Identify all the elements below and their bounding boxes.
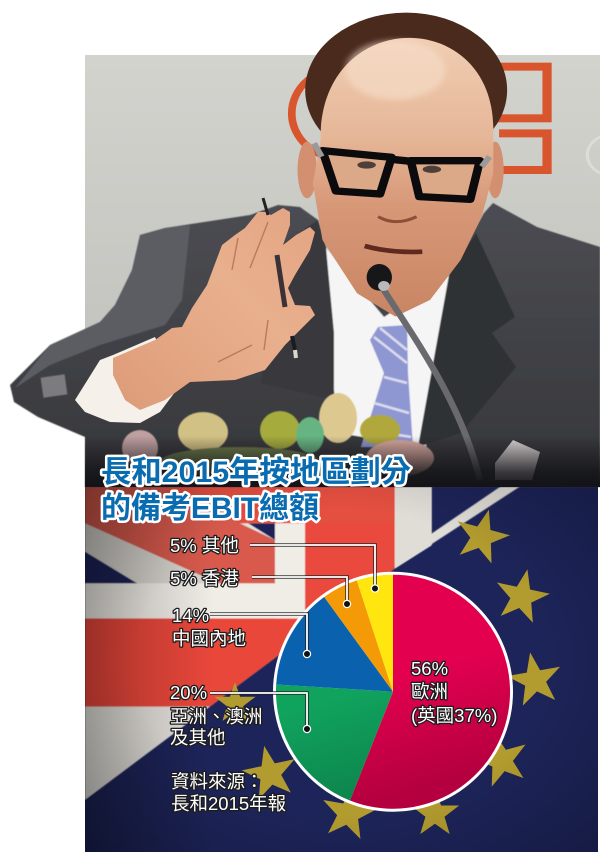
flower arrangement [122,393,434,477]
hair [305,13,507,167]
slice: Asia Australia 20% [276,684,393,800]
label: Asia Australia and others 20% [170,682,263,748]
tie [361,325,413,447]
face [313,38,493,317]
label: Asia Australia and others 20%: 及其他 [170,727,226,748]
suit [10,203,600,487]
leader lines [210,545,379,733]
wall backdrop [85,55,600,487]
source note [171,771,286,814]
cuff [75,337,178,423]
sleeve buttons [41,374,67,398]
pen [263,198,296,358]
orange logo [292,67,547,170]
EU stars [214,503,566,841]
microphone [367,264,480,480]
slice: China 14% [276,597,393,692]
glasses temples [314,143,489,167]
lapel shadow [418,233,516,447]
label: Europe 56%: 56% [411,658,448,679]
title: 長和2015年按地區劃分 [101,456,411,489]
ears [298,142,317,198]
label: Europe 56%: (英國37%) [411,705,497,726]
label: Asia Australia and others 20%: 亞洲、澳洲 [170,706,263,727]
hand [113,208,315,410]
shoulder highlight [15,225,190,388]
label: mainland China 14% [172,605,246,649]
shirt [326,248,449,447]
slice: Europe 56% [350,575,510,809]
label: Europe 56%: 歐洲 [411,681,448,702]
pocket square [495,440,540,480]
background flags panel [85,470,598,852]
faint logo text [587,135,600,175]
slice: Others 5% [357,575,393,692]
head [298,13,507,480]
pie shading [276,575,510,809]
label: Europe 56% [411,658,497,726]
forehead highlight [346,40,445,100]
slice: Hong Kong 5% [324,580,393,692]
label: Asia Australia and others 20%: 20% [170,682,207,703]
pie chart [273,572,513,812]
eyes [357,161,441,173]
title: 的備考EBIT總額 [101,492,319,525]
source note: 長和2015年報 [171,793,286,814]
label: Hong Kong 5%: 5% 香港 [170,568,239,589]
photo of speaker [10,13,600,487]
label: others 5%: 5% 其他 [170,535,239,556]
upper-right white diagonal band [394,487,520,568]
source note: 資料來源： [171,771,264,792]
label: mainland China 14%: 14% [172,605,209,626]
label: mainland China 14%: 中國內地 [172,628,246,649]
glasses [322,151,480,199]
Union Jack flag [85,473,432,807]
title [101,456,411,525]
nose and mouth [365,217,422,252]
dark fade at photo bottom [85,436,600,487]
